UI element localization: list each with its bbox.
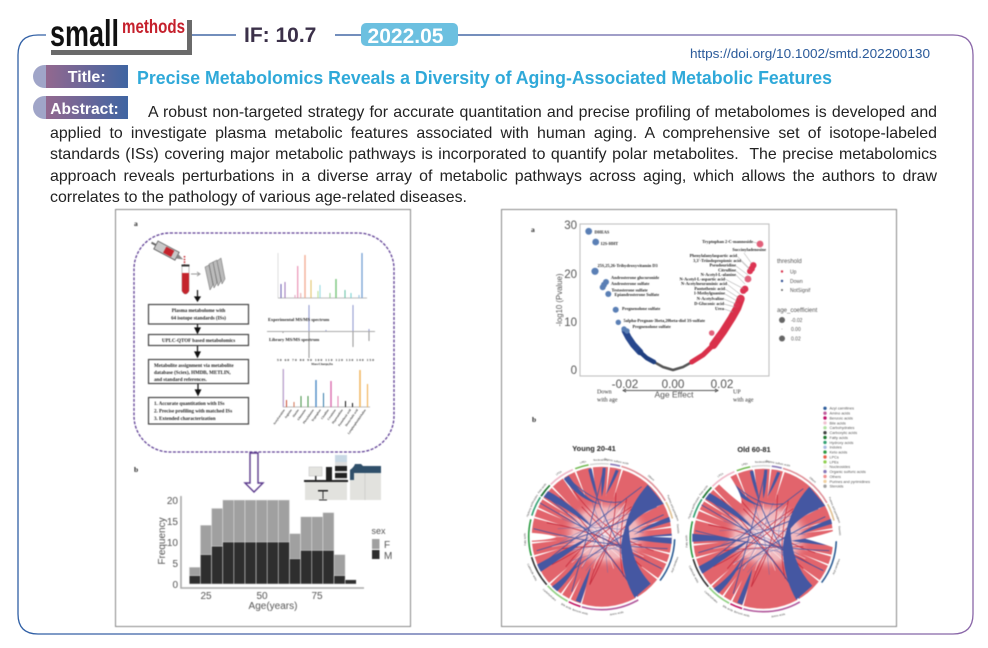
figure: left workflow panel: b xyxy=(134,465,138,474)
flow box: outcomes: 1. Accurate quantitation with ISs xyxy=(154,402,224,407)
chart: age histogram: 75 xyxy=(311,591,323,602)
chart: age histogram: 20 xyxy=(167,496,178,507)
chart: chromatogram xyxy=(278,253,367,298)
chart: metabolite bar chart: Tryptophan xyxy=(311,408,322,422)
right volcano labels: Succinyladenosine xyxy=(732,247,766,252)
volcano legend xyxy=(777,259,818,342)
chart: volcano plot: with age xyxy=(733,398,754,404)
volcano leader lines xyxy=(724,242,757,312)
left volcano labels: Pregnenolone sulfate xyxy=(622,306,660,311)
figure: right results panel: a xyxy=(531,225,535,234)
right volcano labels: Citrulline xyxy=(718,268,736,272)
left volcano labels: Androsterone sulfate xyxy=(611,281,649,286)
right volcano labels: D-Gluconic acid xyxy=(694,301,725,306)
chord legend: Carbohydrates xyxy=(830,426,855,430)
chart: metabolite bar chart: Lysophosphatidylcholine xyxy=(347,408,367,435)
chart: metabolite bar chart: Phenylalanine xyxy=(303,408,315,424)
abstract text: standards (ISs) covering major metabolic pathways is incorporated to quantify polar metabolites. The precise metabolomics xyxy=(50,146,937,163)
flow box: metabolite assignment: database (Sciex), HMDB, METLIN, xyxy=(154,371,231,376)
arrow: down to instrument xyxy=(245,453,263,492)
chart: volcano plot: UP xyxy=(733,390,741,396)
right volcano labels xyxy=(680,239,766,311)
chart: age histogram: 0 xyxy=(172,580,178,591)
left volcano labels: Epiandrosterone Sulfate xyxy=(614,292,659,297)
chord legend: Amino acids xyxy=(830,412,850,416)
chord legend: Nucleosides xyxy=(830,465,850,469)
chord legend: Hydroxy acids xyxy=(830,441,853,445)
right volcano labels: N-Acetylvaline xyxy=(697,296,724,301)
chart: age histogram: 10 xyxy=(167,538,178,549)
icon: mass spectrometry instrument xyxy=(304,455,381,500)
chart: volcano plot: 0.00 xyxy=(662,378,685,391)
left volcano labels: 5alpha-Pregnan-3beta,20beta-diol 3S-sulfate xyxy=(624,318,705,323)
flow box: metabolite assignment: Metabolite assignment via metabolite xyxy=(154,364,234,369)
chart: metabolite bar chart: Acetylcarnitine xyxy=(273,408,286,426)
chart: volcano plot: 0 xyxy=(571,365,577,377)
chart: metabolite bar chart: Glutamine xyxy=(297,408,307,421)
chord diagram heading: young: Young 20-41 xyxy=(572,444,616,453)
flow box: plasma metabolome xyxy=(148,304,248,324)
left volcano labels xyxy=(594,230,705,329)
chord legend: Carboxylic acids xyxy=(830,431,857,435)
right volcano labels: Tryptophan 2-C-mannoside xyxy=(702,239,753,244)
right volcano labels: N-Acetyl-L-alanine xyxy=(701,272,736,277)
volcano legend: age_coefficient xyxy=(777,308,818,314)
abstract label xyxy=(33,96,128,119)
chord diagram: young 20-41 xyxy=(523,457,681,617)
chart: age histogram: F xyxy=(384,540,390,551)
chord legend: LPEs xyxy=(830,460,839,464)
right volcano labels: Pseudouridine xyxy=(709,262,736,268)
chord diagram: old 60-81 xyxy=(684,459,842,619)
dashed workflow frame xyxy=(134,233,394,452)
volcano legend: 0.00 xyxy=(791,327,801,333)
header connector lines xyxy=(192,34,500,36)
chord legend: Bile acids xyxy=(830,421,846,425)
chart: age histogram xyxy=(157,496,392,612)
flow box: outcomes: 2. Precise profiling with matched ISs xyxy=(154,410,232,414)
chord legend: LPCs xyxy=(830,455,839,459)
chart: volcano plot: Down xyxy=(597,390,612,396)
left volcano labels: Androsterone glucuronide xyxy=(611,275,659,280)
volcano curve points xyxy=(625,299,741,370)
chart: age histogram: M xyxy=(384,551,392,562)
chord legend xyxy=(823,407,870,489)
abstract text xyxy=(50,104,937,206)
left volcano labels: Testosterone sulfate xyxy=(612,288,648,292)
right volcano labels: Pantothenic acid xyxy=(694,286,726,291)
chart: mirror MS/MS spectrum: Experimental MS/MS spectrum xyxy=(268,317,329,322)
volcano legend: Down xyxy=(790,279,803,285)
chart: mirror MS/MS spectrum xyxy=(267,305,375,366)
flow box: metabolite assignment xyxy=(148,360,248,384)
flow box: plasma metabolome: Plasma metabolome with xyxy=(172,309,226,314)
chord legend: Purines and pyrimidines xyxy=(830,480,870,484)
abstract text: approach reveals perturbations in a diverse array of metabolic pathways across aging, which allows the authors to draw xyxy=(50,168,937,185)
chord legend: Benzoic acids xyxy=(830,416,853,420)
chart: age histogram: 15 xyxy=(167,517,178,528)
chord legend: Steroids xyxy=(830,485,844,489)
right volcano labels: 3,3'-Triiodopropionic acid xyxy=(693,258,742,263)
chord legend: Keto acids xyxy=(830,450,847,454)
flow box: UPLC-QTOF: UPLC-QTOF based metabolomics xyxy=(162,339,235,344)
doi link: https://doi.org/10.1002/smtd.202200130 xyxy=(690,46,930,61)
chart: metabolite bar chart: Deoxycholic acid xyxy=(345,408,359,427)
chart: age histogram: sex xyxy=(372,526,386,536)
chart: volcano plot: 0.02 xyxy=(711,378,733,391)
chart: age histogram: 5 xyxy=(172,559,178,570)
flow box: outcomes: 3. Extended characterization xyxy=(154,417,216,422)
figure: right results panel xyxy=(502,210,896,626)
abstract text: correlates to the pathology of various age-related diseases. xyxy=(50,189,467,206)
date badge: 2022.05 xyxy=(368,25,444,48)
chord legend: Fatty acids xyxy=(830,436,848,440)
volcano legend: NotSignif xyxy=(790,288,811,294)
flow box: outcomes xyxy=(148,398,248,424)
abstract label: Abstract: xyxy=(50,101,119,118)
icon: syringe xyxy=(149,239,185,264)
right volcano labels: N-Acetyl-L-aspartic acid xyxy=(680,276,726,282)
chart: age histogram: 25 xyxy=(200,591,212,602)
flow box: UPLC-QTOF xyxy=(148,334,248,346)
abstract text: applied to investigate plasma metabolic features associated with human aging. A comprehensive set of isotope-labeled xyxy=(50,125,937,142)
chart: age histogram: 50 xyxy=(256,591,268,602)
flow box: metabolite assignment: and standard references. xyxy=(154,378,207,383)
chart: volcano plot xyxy=(555,220,769,404)
volcano legend: threshold xyxy=(777,259,802,265)
chart: volcano plot: 10 xyxy=(564,317,577,329)
chart: volcano plot: 30 xyxy=(564,220,577,232)
icon: blood drops xyxy=(184,256,186,265)
figure: right results panel: b xyxy=(532,415,536,424)
chart: metabolite bar chart: Citrulline xyxy=(321,408,330,420)
header mask for badges xyxy=(236,28,335,42)
arrow: tube to strips xyxy=(191,272,200,276)
logo: small methods: methods xyxy=(122,17,185,38)
icon: blood tube xyxy=(182,264,190,294)
chart: metabolite bar chart: Alanine xyxy=(292,408,300,418)
volcano legend: Up xyxy=(790,270,797,276)
chart: volcano plot: Age Effect xyxy=(654,390,694,400)
chord diagram heading: old: Old 60-81 xyxy=(737,445,771,454)
chord legend: Acyl carnitines xyxy=(830,407,854,411)
chart: metabolite bar chart: Hypoxanthine xyxy=(332,408,344,424)
figure: left workflow panel xyxy=(116,210,410,626)
chart: mirror MS/MS spectrum: 50 60 70 80 90 100 110 120 130 140 150 xyxy=(277,358,374,362)
chord legend: Others xyxy=(830,475,841,479)
chart: age histogram: Age(years) xyxy=(249,601,297,612)
left volcano labels: DHEAS xyxy=(594,230,610,234)
chart: metabolite bar chart xyxy=(273,369,370,435)
chart: volcano plot: -0.02 xyxy=(612,378,638,391)
chart: mirror MS/MS spectrum: Library MS/MS spectrum xyxy=(269,337,319,342)
left volcano labels: Pregnenolone sulfate xyxy=(632,324,671,329)
figure: left workflow panel: a xyxy=(134,219,138,228)
chart: volcano plot: with age xyxy=(597,398,618,404)
logo: small methods: small xyxy=(50,13,119,54)
chart: metabolite bar chart: Pantothenic acid xyxy=(338,408,352,427)
chart: volcano plot: -log10 (Pvalue) xyxy=(555,273,564,326)
paper title: Precise Metabolomics Reveals a Diversity of Aging-Associated Metabolic Features xyxy=(137,68,832,88)
right volcano labels: N-Acetylneuraminic acid xyxy=(681,281,728,286)
title label: Title: xyxy=(68,69,106,86)
chart: metabolite bar chart: Creatinine xyxy=(327,408,337,421)
logo: small methods xyxy=(46,13,192,55)
left volcano labels: 12S-HHT xyxy=(600,241,618,246)
flow arrows xyxy=(195,290,200,395)
chart: volcano plot: 20 xyxy=(564,269,577,281)
chord legend: Organic sulfuric acids xyxy=(830,470,866,474)
icon: sample tube strips xyxy=(205,258,225,290)
right volcano labels: Urea xyxy=(715,306,725,311)
title label xyxy=(33,65,128,88)
right volcano labels: Phenylalanylaspartic acid xyxy=(690,253,738,258)
volcano legend: 0.02 xyxy=(791,336,801,342)
impact factor: IF: 10.7 xyxy=(244,24,316,47)
chart: mirror MS/MS spectrum: Mass/Charge,Da xyxy=(311,362,333,366)
chart: metabolite bar chart: Arginine xyxy=(284,408,293,419)
left volcano labels: 25S,25,26-Trihydroxyvitamin D3 xyxy=(598,263,658,268)
volcano legend: -0.02 xyxy=(791,318,803,324)
abstract text: A robust non-targeted strategy for accurate quantitation and precise profiling of metabolomes is developed and xyxy=(148,104,937,121)
chart: age histogram: Frequency xyxy=(157,517,168,565)
chord legend: Indoles xyxy=(830,446,842,450)
flow box: plasma metabolome: 64 isotope standards (ISs) xyxy=(171,316,226,322)
right volcano labels: 1-Methylguanine xyxy=(694,290,725,296)
